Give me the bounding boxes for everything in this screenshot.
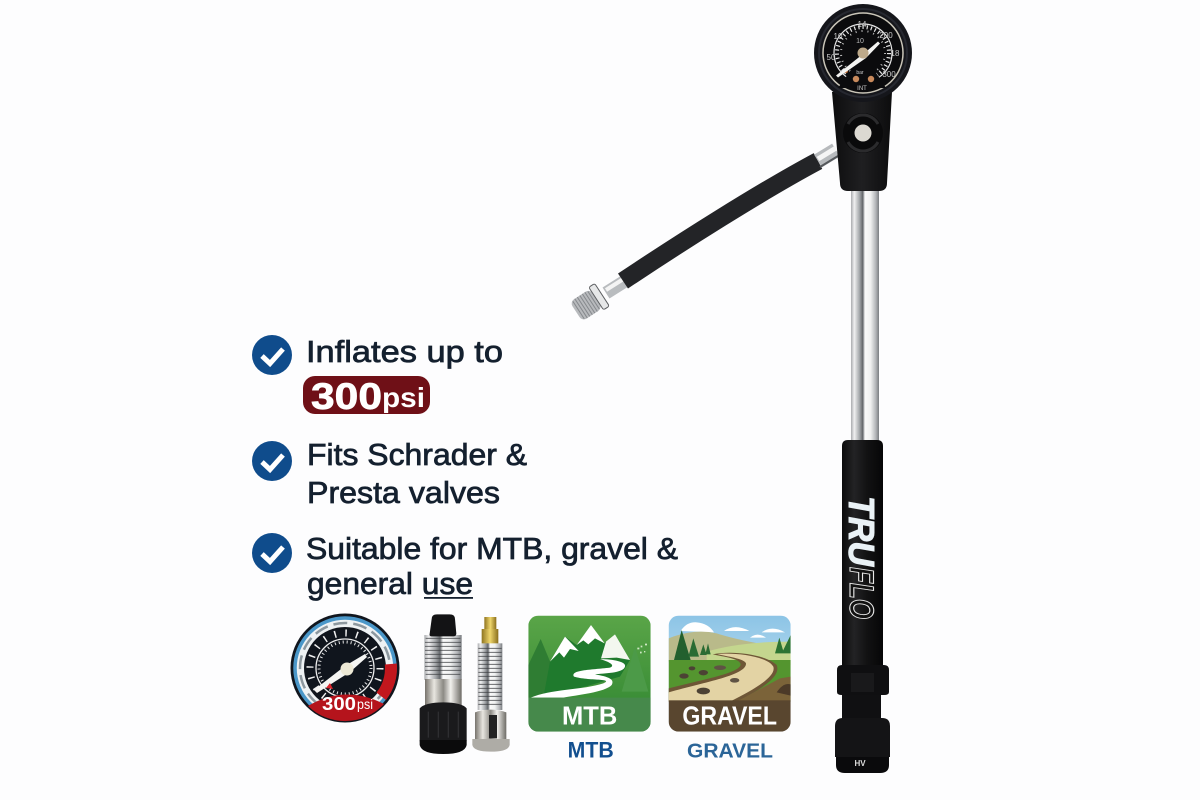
feature: valves: Presta valves xyxy=(307,475,500,510)
hills xyxy=(668,632,756,662)
pressure dial: 200 xyxy=(879,31,893,40)
badge: 300psi: 300 xyxy=(311,376,382,417)
gauge body xyxy=(832,92,892,191)
tiles xyxy=(528,616,791,763)
chrome shaft xyxy=(851,185,879,441)
feature: use: general use xyxy=(307,566,473,601)
TRUFLO brand: FLO xyxy=(842,567,880,619)
pump product xyxy=(569,4,912,773)
pressure dial: INT xyxy=(857,86,867,92)
badge: 300psi: psi xyxy=(382,382,425,413)
feature: use xyxy=(252,531,678,601)
pressure dial: 10 xyxy=(834,32,843,41)
pressure dial: 14 xyxy=(858,20,867,29)
TRUFLO brand: TRU xyxy=(841,496,882,567)
mountains xyxy=(543,625,630,698)
clouds xyxy=(681,622,714,632)
icon: valves xyxy=(420,614,510,754)
schrader valve xyxy=(420,614,467,754)
release button xyxy=(843,113,883,153)
tile: MTB: MTB xyxy=(562,700,617,730)
icon: 300psi gauge: psi xyxy=(357,696,373,712)
label: GRAVEL: GRAVEL xyxy=(687,740,773,763)
icon: check xyxy=(252,533,292,573)
road xyxy=(669,653,777,702)
badge: 300psi xyxy=(303,376,430,417)
pressure dial xyxy=(814,4,912,102)
presta valve xyxy=(472,617,510,752)
tile: gravel xyxy=(669,616,791,732)
hose xyxy=(569,148,838,323)
feature list xyxy=(252,334,678,601)
TRUFLO brand xyxy=(841,496,882,619)
trees xyxy=(674,630,691,660)
tile: gravel: GRAVEL xyxy=(682,700,777,730)
pressure dial: 300 xyxy=(882,70,896,79)
lower gap xyxy=(838,53,886,88)
tile: MTB xyxy=(528,616,651,732)
handle xyxy=(842,440,883,668)
pressure dial: 18 xyxy=(891,49,900,58)
label: MTB: MTB xyxy=(568,738,614,763)
trees xyxy=(528,639,550,698)
pressure dial: 50 xyxy=(827,53,836,62)
collar xyxy=(837,665,889,722)
trail xyxy=(531,659,625,698)
feature: use: Suitable for MTB, gravel & xyxy=(306,531,678,566)
valve head: HV xyxy=(854,759,866,768)
feature: pressure: Inflates up to xyxy=(306,334,503,369)
icon: 300psi gauge xyxy=(290,614,400,722)
feature: valves: Fits Schrader & xyxy=(307,437,527,472)
icon: 300psi gauge: 300 xyxy=(322,694,356,714)
icon: check xyxy=(252,441,292,481)
stones xyxy=(697,688,710,694)
pressure dial: 10 xyxy=(856,38,864,45)
feature: pressure xyxy=(252,334,503,417)
valve head xyxy=(835,718,890,773)
pressure dial: bar xyxy=(856,70,864,76)
feature: valves xyxy=(252,437,527,510)
icon: check xyxy=(252,335,292,375)
